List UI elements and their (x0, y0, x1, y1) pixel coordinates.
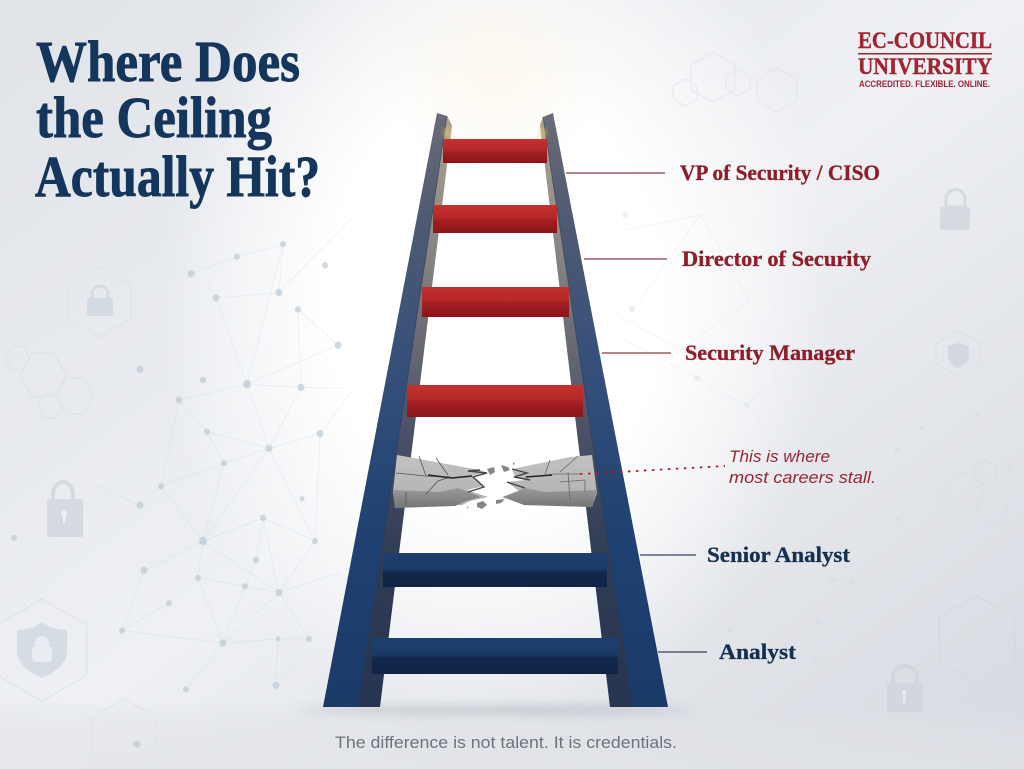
rung: Senior Analyst (383, 553, 607, 587)
label: Senior Analyst: Senior Analyst (707, 542, 851, 567)
icon: lock top right (940, 190, 970, 230)
ground shadow (295, 706, 695, 714)
logo: EC-Council University: ACCREDITED. FLEXIBLE. ONLINE. (859, 79, 990, 90)
right rail (540, 113, 668, 707)
dotted callout line (580, 466, 725, 474)
icon: lock bottom right (887, 666, 923, 712)
label: Security Manager: Security Manager (685, 340, 855, 365)
top glow at rails (444, 128, 546, 138)
broken rung (393, 455, 597, 509)
network pattern left (11, 215, 355, 748)
title: Actually Hit? (35, 144, 320, 209)
label: Analyst: Analyst (719, 639, 797, 664)
rung: stall point upper (407, 385, 583, 417)
title: Where Does (36, 29, 300, 94)
leader line Manager (602, 352, 671, 354)
rung: Director of Security (433, 205, 557, 233)
rung: VP of Security / CISO (443, 139, 547, 163)
icon: lock left (47, 482, 83, 537)
icon: hexagon bottom left (93, 699, 184, 769)
rung: Analyst (372, 638, 618, 674)
icon: hexagon lock upper left (68, 266, 131, 337)
callout: stall text: This is where (729, 448, 830, 466)
icon: large hexagon right (939, 596, 1015, 683)
broken rung left half (393, 455, 488, 508)
logo: EC-Council University (858, 28, 992, 90)
leader line Director (584, 258, 667, 260)
leader line Analyst (658, 651, 707, 653)
callout: stall text: most careers stall. (729, 469, 876, 487)
logo: EC-Council University: EC-COUNCIL (858, 28, 992, 53)
left rail (323, 113, 452, 707)
icon: hexagon cluster left (5, 346, 93, 418)
rock fragments (467, 462, 515, 509)
icon: hexagons top right (673, 52, 797, 112)
icon: hexagon shield right (936, 331, 981, 376)
rung: Security Manager (422, 287, 569, 317)
label: Director of Security: Director of Security (682, 246, 871, 271)
logo: EC-Council University: UNIVERSITY (858, 54, 992, 79)
title (35, 29, 320, 209)
leader line VP (566, 172, 665, 174)
ladder (323, 113, 668, 707)
network pattern right (610, 212, 1013, 663)
footer text: The difference is not talent. It is credentials. (335, 733, 677, 752)
icon: hexagon shield bottom left (0, 599, 87, 701)
icon: hexagon cluster right (944, 460, 1006, 526)
leader line Senior Analyst (640, 554, 696, 556)
title: the Ceiling (36, 85, 272, 150)
broken rung right half (502, 455, 597, 507)
label: VP of Security / CISO: VP of Security / CISO (680, 160, 880, 185)
